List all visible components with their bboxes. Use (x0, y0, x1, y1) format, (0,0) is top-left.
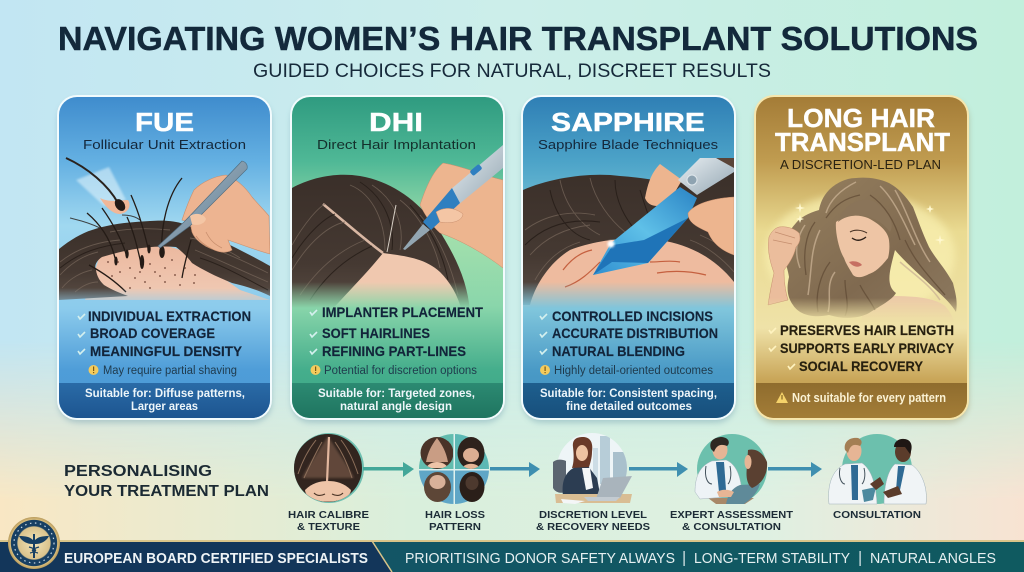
footer: values (405, 551, 996, 567)
footer: certification: EUROPEAN BOARD CERTIFIED SPECIALISTS (64, 551, 368, 567)
suitable text: natural angle design (340, 401, 452, 413)
label: HAIR LOSS (425, 509, 485, 521)
heading: DHI: DHI (369, 107, 423, 137)
panel: Long Hair Transplant (754, 95, 969, 423)
suitable text: Suitable for: Diffuse patterns, (85, 388, 245, 400)
laptop and desk (555, 476, 632, 504)
blade and hand (593, 158, 734, 275)
list: features: IMPLANTER PLACEMENT (322, 304, 483, 320)
icon: medical medallion (8, 517, 60, 569)
footer bar (0, 540, 1024, 572)
band: suitable for (523, 383, 734, 418)
hair mass (783, 178, 957, 318)
heading: Long Hair Transplant: TRANSPLANT (775, 127, 950, 157)
list: features: MEANINGFUL DENSITY (90, 343, 243, 359)
part line (323, 204, 383, 253)
hair mass (59, 221, 270, 300)
list: features: REFINING PART-LINES (322, 343, 466, 359)
subtitle: GUIDED CHOICES FOR NATURAL, DISCREET RESULTS (253, 61, 771, 82)
note: detail: Highly detail-oriented outcomes (554, 365, 713, 377)
suitable text (85, 388, 245, 413)
panel: FUE (57, 95, 272, 423)
label (288, 509, 369, 533)
panel: Sapphire (521, 95, 736, 423)
heading: personalising (64, 463, 269, 500)
list: features: ACCURATE DISTRIBUTION (552, 325, 718, 341)
label (536, 509, 650, 533)
list: features (78, 308, 251, 359)
band: suitable for (292, 383, 503, 418)
arrow 3 (629, 462, 688, 477)
suitable text: Suitable for: Consistent spacing, (540, 388, 717, 400)
heading: Long Hair Transplant (775, 103, 950, 157)
label: EXPERT ASSESSMENT (670, 509, 794, 521)
step 3: discretion level (536, 433, 650, 533)
heading: personalising: PERSONALISING (64, 463, 212, 480)
label (425, 509, 485, 533)
hand with tweezers (158, 161, 270, 254)
gesture and tablet (862, 477, 902, 502)
suitable text (318, 388, 475, 413)
suitable text: Suitable for: Targeted zones, (318, 388, 475, 400)
footer: values: LONG-TERM STABILITY (694, 551, 850, 567)
shoulder (864, 282, 950, 316)
implanted follicles (87, 178, 191, 292)
subheading: Direct Hair Implantation (317, 137, 476, 152)
list: features: NATURAL BLENDING (552, 343, 685, 359)
hand (768, 227, 800, 305)
footer: values: NATURAL ANGLES (870, 551, 996, 567)
heading: personalising: YOUR TREATMENT PLAN (64, 483, 269, 500)
label: PATTERN (429, 521, 481, 533)
list: features (310, 304, 483, 359)
crown views (424, 472, 484, 502)
subheading: A DISCRETION-LED PLAN (780, 157, 941, 172)
forehead (336, 253, 460, 306)
list: features: INDIVIDUAL EXTRACTION (88, 308, 251, 324)
panel: DHI (290, 95, 505, 423)
list: features: SUPPORTS EARLY PRIVACY (780, 340, 955, 356)
woman top view (420, 437, 453, 469)
list: features (769, 322, 955, 374)
label (670, 509, 794, 533)
face (836, 216, 889, 277)
step 2: hair loss pattern (419, 434, 489, 533)
list: features: BROAD COVERAGE (90, 325, 215, 341)
arrow 4 (768, 462, 822, 477)
list: features: SOCIAL RECOVERY (799, 358, 924, 374)
subheading: Sapphire Blade Techniques (538, 137, 719, 152)
heading: Long Hair Transplant: LONG HAIR (787, 103, 935, 133)
step 4: expert assessment (670, 434, 794, 533)
step 5: consultation (829, 434, 926, 521)
scalp (85, 244, 270, 300)
label: DISCRETION LEVEL (539, 509, 648, 521)
suitable text (540, 388, 717, 413)
suitable text: Larger areas (131, 401, 198, 413)
list: features: PRESERVES HAIR LENGTH (780, 322, 954, 338)
illustration: sapphire blade (523, 158, 734, 312)
suitable text: fine detailed outcomes (566, 401, 692, 413)
title: NAVIGATING WOMEN’S HAIR TRANSPLANT SOLUTIONS (58, 20, 978, 57)
subheading: Follicular Unit Extraction (83, 137, 246, 152)
strands (797, 182, 940, 312)
man top view (457, 437, 485, 469)
woman at laptop (563, 437, 600, 496)
doctor left (829, 438, 877, 504)
warning text: Not suitable for every pattern (792, 391, 946, 405)
band: suitable for (59, 383, 270, 418)
illustration: FUE hair extraction (59, 158, 270, 300)
heading: FUE: FUE (135, 107, 194, 137)
footer: values: PRIORITISING DONOR SAFETY ALWAYS (405, 551, 675, 567)
heading: Sapphire: SAPPHIRE (551, 107, 705, 137)
list: features (540, 308, 718, 359)
illustration: DHI hair (292, 145, 503, 312)
illustration: woman with long hair (765, 178, 957, 326)
arrow 1 (363, 462, 414, 477)
arrow 2 (490, 462, 540, 477)
doctor right (884, 439, 926, 504)
office chair (553, 460, 566, 493)
note: shaving: May require partial shaving (103, 365, 237, 377)
band: warning (756, 383, 967, 418)
label: & TEXTURE (297, 521, 360, 533)
note: discretion: Potential for discretion options (324, 365, 477, 377)
list: features: SOFT HAIRLINES (322, 325, 430, 341)
label: HAIR CALIBRE (288, 509, 369, 521)
hand with implanter pen (403, 145, 503, 268)
list: features: CONTROLLED INCISIONS (552, 308, 713, 324)
step 1: hair calibre (288, 433, 369, 533)
label: & CONSULTATION (682, 521, 781, 533)
label: CONSULTATION (833, 509, 921, 521)
label: & RECOVERY NEEDS (536, 521, 650, 533)
